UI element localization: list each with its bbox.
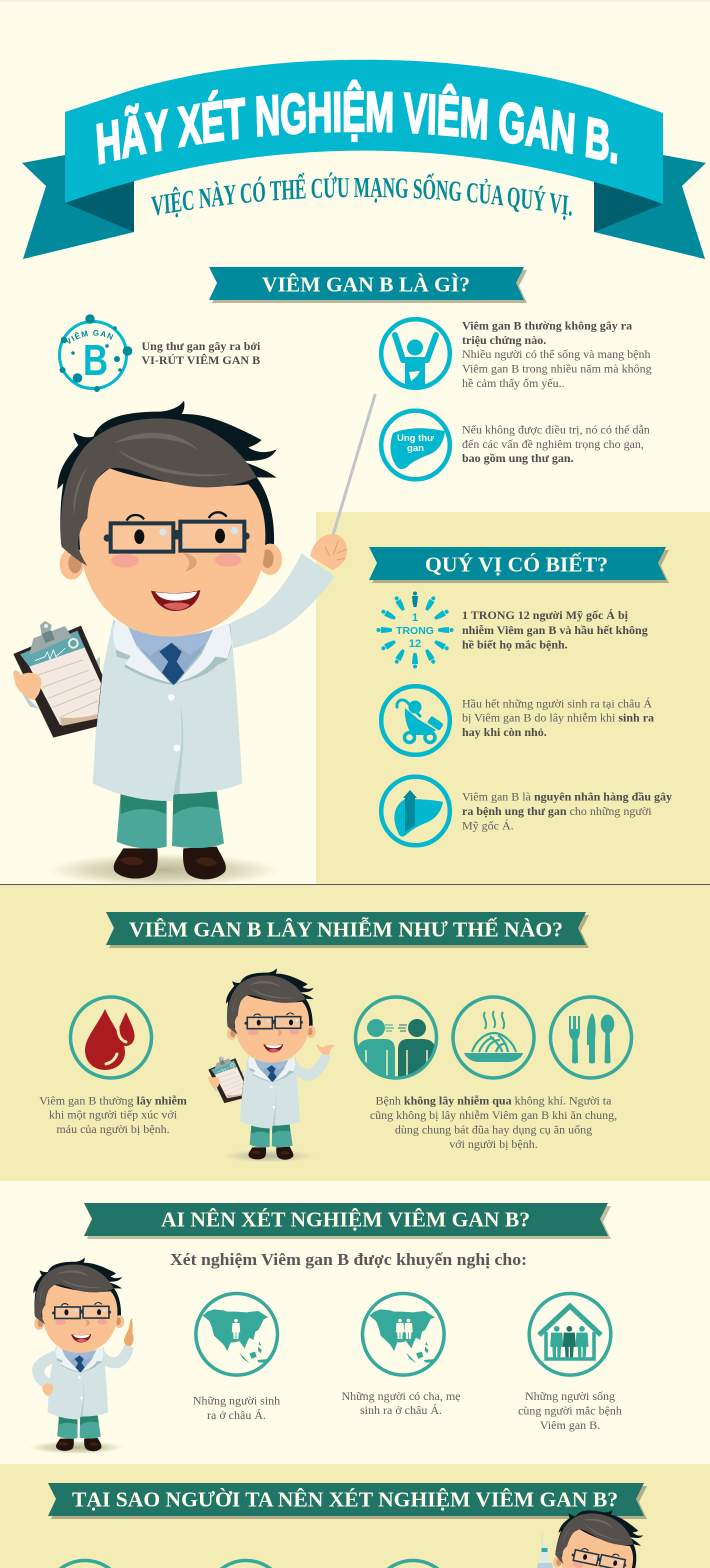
text: 1 in 12 bbox=[462, 608, 648, 652]
text: liver cancer: Nếu không được điều trị, nó có thể dẫn bbox=[462, 422, 650, 436]
text: parents born in Asia bbox=[342, 1389, 460, 1417]
text: no symptoms: triệu chứng nào. bbox=[462, 333, 546, 347]
text: no symptoms: Viêm gan B trong nhiều năm mà không bbox=[462, 362, 652, 376]
text: liver cancer bbox=[462, 422, 650, 465]
text: blood transmission bbox=[39, 1094, 187, 1136]
subtitle: VIỆC NÀY CÓ THỂ CỨU MẠNG SỐNG CỦA QUÝ VỊ. bbox=[151, 172, 572, 220]
panel: why test background bbox=[0, 1464, 710, 1568]
icon: liver with arrow bbox=[381, 777, 450, 845]
icon: 1 in 12 bbox=[376, 592, 454, 668]
text: 1 in 12: 1 TRONG 12 người Mỹ gốc Á bị bbox=[462, 608, 629, 622]
heading: what is hepatitis B: VIÊM GAN B LÀ GÌ? bbox=[262, 272, 470, 296]
text: 1 in 12: hề biết họ mắc bệnh. bbox=[462, 638, 568, 652]
text: not transmitted by: với người bị bệnh. bbox=[449, 1137, 538, 1151]
heading: who should be tested: AI NÊN XÉT NGHIỆM VIÊM GAN B? bbox=[161, 1208, 530, 1232]
icon: liver cancer: Ung thư bbox=[397, 433, 434, 444]
illustration: doctor with raised finger bbox=[28, 1257, 134, 1454]
text: virus caption: VI-RÚT VIÊM GAN B bbox=[142, 353, 260, 367]
heading: did you know bbox=[369, 547, 669, 583]
text: born in Asia bbox=[462, 696, 654, 739]
text: parents born in Asia: sinh ra ở châu Á. bbox=[360, 1403, 442, 1417]
text: parents born in Asia: Những người có cha, mẹ bbox=[342, 1389, 460, 1403]
icon: parents born in Asia bbox=[362, 1294, 444, 1375]
arm with pointer bbox=[230, 395, 375, 648]
text: born in Asia: Hầu hết những người sinh ra tại châu Á bbox=[462, 696, 652, 710]
text: leading cause: Mỹ gốc Á. bbox=[462, 818, 514, 832]
heading: what is hepatitis B bbox=[209, 267, 527, 303]
text: household: Những người sống bbox=[525, 1389, 615, 1403]
icon: syringe bbox=[537, 1533, 553, 1568]
text: blood transmission: máu của người bị bệnh. bbox=[56, 1122, 170, 1136]
text: blood transmission: khi một người tiếp xúc với bbox=[49, 1108, 178, 1122]
text: no symptoms: hề cảm thấy ốm yếu.. bbox=[462, 376, 565, 390]
left arm on hip bbox=[32, 1350, 55, 1389]
text: born in Asia bbox=[193, 1394, 280, 1422]
heading: how it spreads bbox=[106, 912, 589, 948]
text: born in Asia: hay khi còn nhỏ. bbox=[462, 725, 547, 739]
icon: 1 in 12: 1 bbox=[412, 612, 418, 624]
text: 1 in 12: nhiễm Viêm gan B và hầu hết không bbox=[462, 623, 648, 637]
icon: born in Asia bbox=[196, 1294, 278, 1375]
heading: did you know: QUÝ VỊ CÓ BIẾT? bbox=[425, 552, 608, 576]
text: not transmitted by: dùng chung bát đũa hay dụng cụ ăn uống bbox=[395, 1122, 592, 1136]
icon: cutlery bbox=[550, 997, 632, 1078]
illustration: doctor waving bbox=[208, 968, 334, 1163]
text: liver cancer: đến các vấn đề nghiêm trọng cho gan, bbox=[462, 437, 644, 451]
text: virus caption: Ung thư gan gây ra bởi bbox=[142, 339, 261, 353]
text: leading cause bbox=[462, 790, 672, 832]
icon: liver cancer bbox=[381, 411, 450, 479]
title banner bbox=[22, 60, 706, 259]
text: not transmitted by bbox=[370, 1094, 617, 1151]
text: virus caption bbox=[142, 339, 261, 367]
illustration: large doctor with pointer bbox=[13, 395, 375, 887]
text: household: Viêm gan B. bbox=[540, 1418, 600, 1432]
illustration: doctor head bbox=[547, 1500, 649, 1568]
text: blood transmission: Viêm gan B thường lây nhiễm bbox=[39, 1094, 187, 1108]
banner arc bbox=[65, 60, 663, 204]
icon: blood drops bbox=[70, 997, 152, 1078]
icon: virus B badge: VIÊM GAN bbox=[66, 330, 114, 344]
text: born in Asia: bị Viêm gan B do lây nhiễm khi sinh ra bbox=[462, 710, 654, 724]
icon: house household bbox=[529, 1294, 611, 1375]
text: leading cause: ra bệnh ung thư gan cho những người bbox=[462, 804, 652, 818]
text: not transmitted by: Bệnh không lây nhiễm qua không khí. Người ta bbox=[376, 1094, 612, 1108]
heading: how it spreads: VIÊM GAN B LÂY NHIỄM NHƯ THẾ NÀO? bbox=[129, 916, 563, 942]
text: born in Asia: ra ở châu Á. bbox=[207, 1408, 266, 1422]
text: household bbox=[518, 1389, 622, 1432]
icon: 1 in 12: TRONG bbox=[396, 625, 434, 637]
banner tails bbox=[22, 155, 706, 259]
icon: circle 1 partial bbox=[44, 1560, 126, 1568]
icon: 1 in 12: 12 bbox=[409, 638, 421, 650]
waving arm bbox=[295, 1044, 334, 1081]
right arm with raised finger bbox=[104, 1345, 134, 1368]
icon: virus B badge bbox=[58, 314, 132, 392]
text: liver cancer: bao gồm ung thư gan. bbox=[462, 451, 574, 465]
text: born in Asia: Những người sinh bbox=[193, 1394, 280, 1408]
heading: who should be tested bbox=[84, 1203, 611, 1239]
icon: circle 3 partial bbox=[372, 1560, 454, 1568]
text: no symptoms: Nhiều người có thể sống và mang bệnh bbox=[462, 347, 650, 361]
icon: circle 2 partial bbox=[206, 1560, 286, 1568]
icon: two people not airborne bbox=[356, 997, 436, 1082]
icon: virus B badge: B bbox=[83, 336, 108, 385]
icon: noodle bowl bbox=[453, 997, 534, 1078]
main title: HÃY XÉT NGHIỆM VIÊM GAN B. bbox=[96, 80, 618, 165]
text: no symptoms bbox=[462, 318, 652, 390]
text: leading cause: Viêm gan B là nguyên nhân hàng đầu gây bbox=[462, 790, 672, 804]
text: not transmitted by: cũng không bị lây nhiễm Viêm gan B khi ăn chung, bbox=[370, 1108, 617, 1122]
heading: why test: TẠI SAO NGƯỜI TA NÊN XÉT NGHIỆM VIÊM GAN B? bbox=[72, 1488, 618, 1512]
panel: did you know background bbox=[316, 512, 710, 884]
icon: stroller bbox=[381, 686, 450, 755]
icon: person with liver bbox=[381, 319, 450, 392]
icon: liver cancer: gan bbox=[407, 443, 424, 454]
text: no symptoms: Viêm gan B thường không gây ra bbox=[462, 318, 632, 332]
text: recommended for: Xét nghiệm Viêm gan B được khuyến nghị cho: bbox=[170, 1250, 527, 1269]
panel: how it spreads background bbox=[0, 885, 710, 1181]
text: household: cùng người mắc bệnh bbox=[518, 1404, 622, 1418]
heading: why test bbox=[48, 1483, 647, 1519]
